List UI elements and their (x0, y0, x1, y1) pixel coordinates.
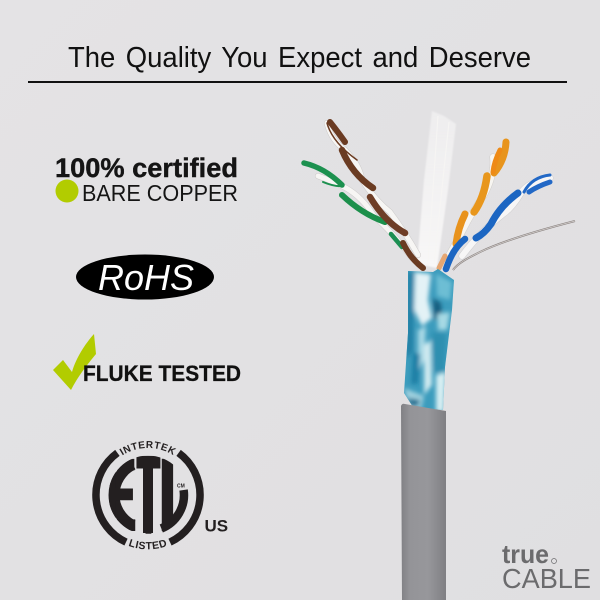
logo: ETL Intertek listed US: INTERTEK (119, 441, 176, 456)
logo: trueCABLE (502, 539, 591, 594)
logo: ETL Intertek listed US: L (156, 436, 205, 554)
badge: Fluke tested (53, 334, 241, 390)
badge: 100% certified bare copper: 100% certified (55, 153, 238, 183)
logo: ETL Intertek listed US: US (204, 516, 228, 536)
wire pair: orange and white (439, 142, 506, 268)
wire pair: brown and white (327, 122, 423, 268)
badge: RoHS: RoHS (98, 257, 194, 298)
logo: ETL Intertek listed US (92, 441, 228, 550)
icon: green dot (56, 180, 78, 202)
badge: RoHS (76, 254, 214, 300)
title rule (28, 81, 567, 83)
wire pair: green and white (304, 163, 412, 258)
foil shield (404, 269, 454, 410)
logo: ETL Intertek listed US: CM (177, 484, 185, 490)
logo: ETL Intertek listed US: LISTED (128, 539, 166, 550)
drain wire (453, 221, 575, 270)
cable illustration (304, 111, 575, 600)
outer jacket (401, 404, 446, 600)
separator spline (417, 111, 456, 268)
badge: 100% certified bare copper (55, 153, 238, 206)
wire pair: blue and white (446, 175, 550, 269)
logo: trueCABLE: CABLE (502, 563, 591, 594)
title: The Quality You Expect and Deserve (68, 42, 531, 74)
logo: ETL Intertek listed US: T (136, 432, 161, 558)
icon: green check mark (53, 334, 96, 390)
badge: Fluke tested: FLUKE TESTED (83, 361, 241, 386)
logo: trueCABLE: true (502, 539, 549, 569)
logo: ETL Intertek listed US: E (106, 438, 137, 554)
badge: 100% certified bare copper: BARE COPPER (82, 180, 238, 206)
